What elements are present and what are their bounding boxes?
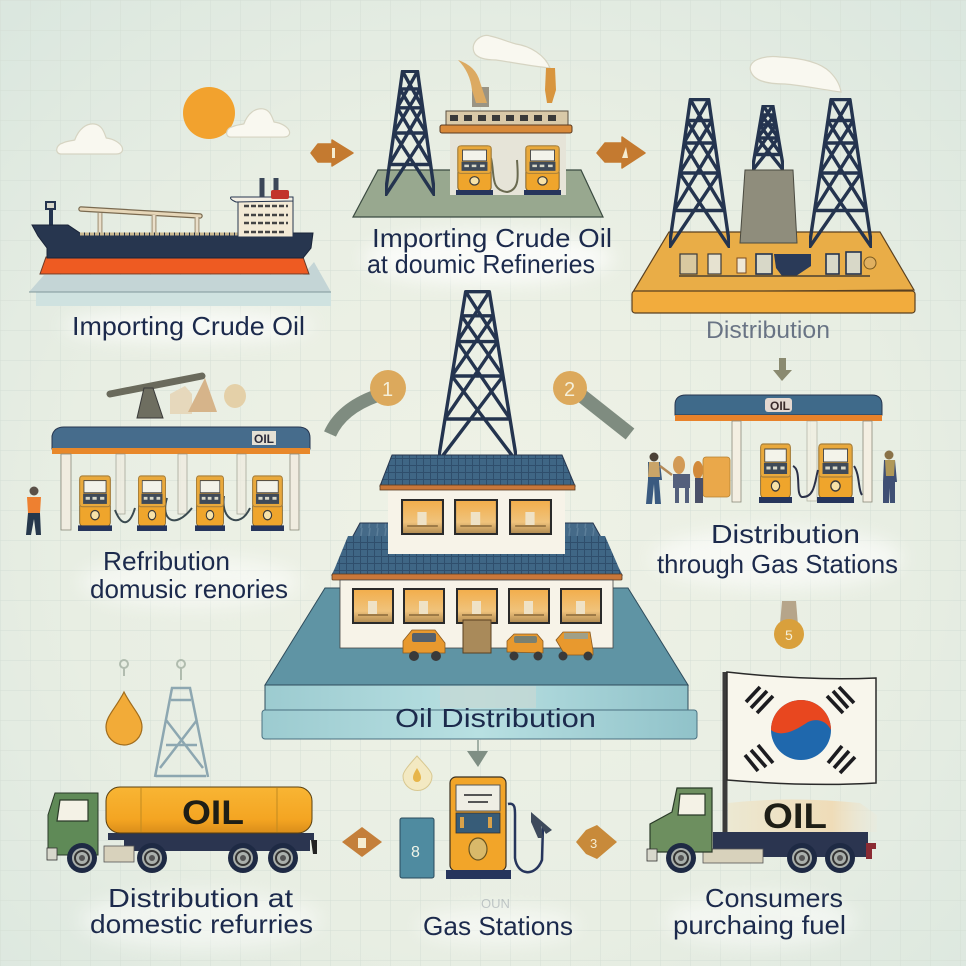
blue canister: 8 (411, 844, 420, 861)
label: consumers: Consumers (705, 883, 843, 913)
arrow: refinery to distribution (597, 137, 645, 168)
station canopy: OIL (254, 432, 274, 446)
flag pole (722, 672, 728, 834)
panel: importing crude oil ship (29, 87, 331, 341)
arrow: numbered badge down (774, 601, 804, 649)
label: domestic refurries: domestic refurries (90, 909, 313, 939)
fuel pump left (456, 146, 493, 195)
icon: center derrick (752, 106, 784, 171)
icon: cloud (750, 57, 841, 92)
fuel pump (817, 444, 854, 503)
truck cab (47, 793, 98, 860)
faded label: OUN (481, 896, 510, 911)
badge 1 with pointer (330, 370, 406, 434)
upper wall (388, 489, 565, 554)
faded small icons (120, 660, 185, 680)
lower roof (332, 523, 622, 580)
fuel hose and nozzle (508, 804, 552, 872)
fuel pump right (524, 146, 561, 195)
refinery base (353, 170, 603, 217)
blue canister (400, 818, 434, 878)
badge 1 with pointer: 1 (382, 379, 393, 401)
label: distribution through gas stations: Distribution (711, 519, 860, 549)
panel: consumers with flag and truck (647, 672, 877, 940)
lower wall (340, 580, 613, 648)
truck chassis (703, 832, 876, 863)
arrow: truck to pump (342, 827, 382, 857)
label line two: through Gas Stations (657, 549, 898, 579)
person (646, 452, 672, 504)
hoses (115, 496, 250, 522)
badge 2 with pointer (553, 371, 630, 434)
tank (106, 787, 312, 833)
fuel pump (195, 476, 225, 531)
panel: gas station with people (646, 395, 898, 579)
panel: left gas station (26, 376, 310, 604)
arrow: pump to consumers: 3 (590, 836, 597, 851)
label: gas stations: Gas Stations (423, 911, 573, 941)
icon: left derrick (669, 100, 730, 248)
car (556, 632, 593, 660)
station pillars (61, 454, 299, 530)
OIL lettering: OIL (763, 797, 827, 836)
fuel pump (78, 476, 112, 531)
arrow: pump to consumers (576, 825, 617, 859)
truck chassis (104, 833, 317, 862)
label: importing crude oil at refineries: Importing Crude Oil (372, 223, 612, 253)
station pillars (732, 421, 872, 502)
arrow: down to gas station (773, 358, 792, 381)
car (403, 630, 445, 661)
label: purchaing fuel: purchaing fuel (673, 910, 846, 940)
flag of south korea (727, 672, 876, 784)
panel: refinery (353, 35, 612, 279)
panel: distribution platform (632, 57, 915, 344)
icon: derrick (385, 71, 435, 196)
people group (673, 456, 703, 503)
ship (32, 178, 313, 274)
refinery building (440, 111, 572, 195)
panel: gas station pump (400, 740, 573, 941)
person (26, 486, 41, 535)
tank seams (141, 788, 277, 832)
icon: sun (183, 87, 235, 139)
fuel pump (759, 444, 792, 503)
icon: faded derrick (155, 688, 208, 777)
panel: tanker truck (47, 660, 317, 939)
label: distribution at: Distribution at (108, 883, 294, 913)
wheels (666, 843, 855, 873)
wheels (67, 843, 298, 873)
arrow: numbered badge down: 5 (785, 627, 793, 643)
icon: smoke cloud (473, 35, 550, 68)
fuel pump (251, 476, 284, 531)
arrow: step one to refinery (311, 140, 353, 166)
refinery flares (458, 60, 556, 107)
large fuel pump (446, 777, 511, 879)
icon: central derrick (438, 292, 517, 462)
car (507, 634, 543, 660)
icon: drop badge (403, 756, 432, 790)
lower windows (353, 589, 601, 623)
water platform (29, 262, 331, 306)
icon: cloud right (227, 109, 290, 137)
arrow: down from platform (467, 740, 488, 767)
badge 2 with pointer: 2 (564, 379, 575, 401)
label: distribution (faded): Distribution (706, 317, 830, 344)
blue platform (262, 588, 697, 739)
label: refribution: Refribution (103, 546, 230, 576)
truck cab (647, 788, 712, 861)
station canopy (675, 395, 882, 421)
grey tank (740, 170, 797, 243)
panel: central oil distribution building (262, 292, 697, 739)
fuel hose (793, 466, 862, 497)
station canopy: OIL (770, 399, 790, 413)
OIL lettering: OIL (182, 794, 244, 832)
label line two: at doumic Refineries (367, 249, 595, 279)
row of small equipment (679, 252, 876, 276)
fuel pump (137, 476, 167, 531)
upper roof (380, 455, 575, 490)
upper windows (402, 500, 551, 534)
icon: cloud left (57, 124, 123, 154)
label: importing crude oil: Importing Crude Oil (72, 311, 305, 341)
icon: oil drop (106, 692, 142, 745)
icon: pumpjack (110, 376, 246, 418)
small pump behind (703, 457, 730, 497)
station canopy (52, 427, 310, 454)
label: oil distribution: Oil Distribution (395, 703, 596, 733)
orange platform (632, 232, 915, 313)
faded tank (728, 800, 877, 832)
label: domusic renories: domusic renories (90, 574, 288, 604)
door (463, 620, 491, 653)
person (883, 450, 897, 503)
icon: right derrick (809, 100, 872, 248)
